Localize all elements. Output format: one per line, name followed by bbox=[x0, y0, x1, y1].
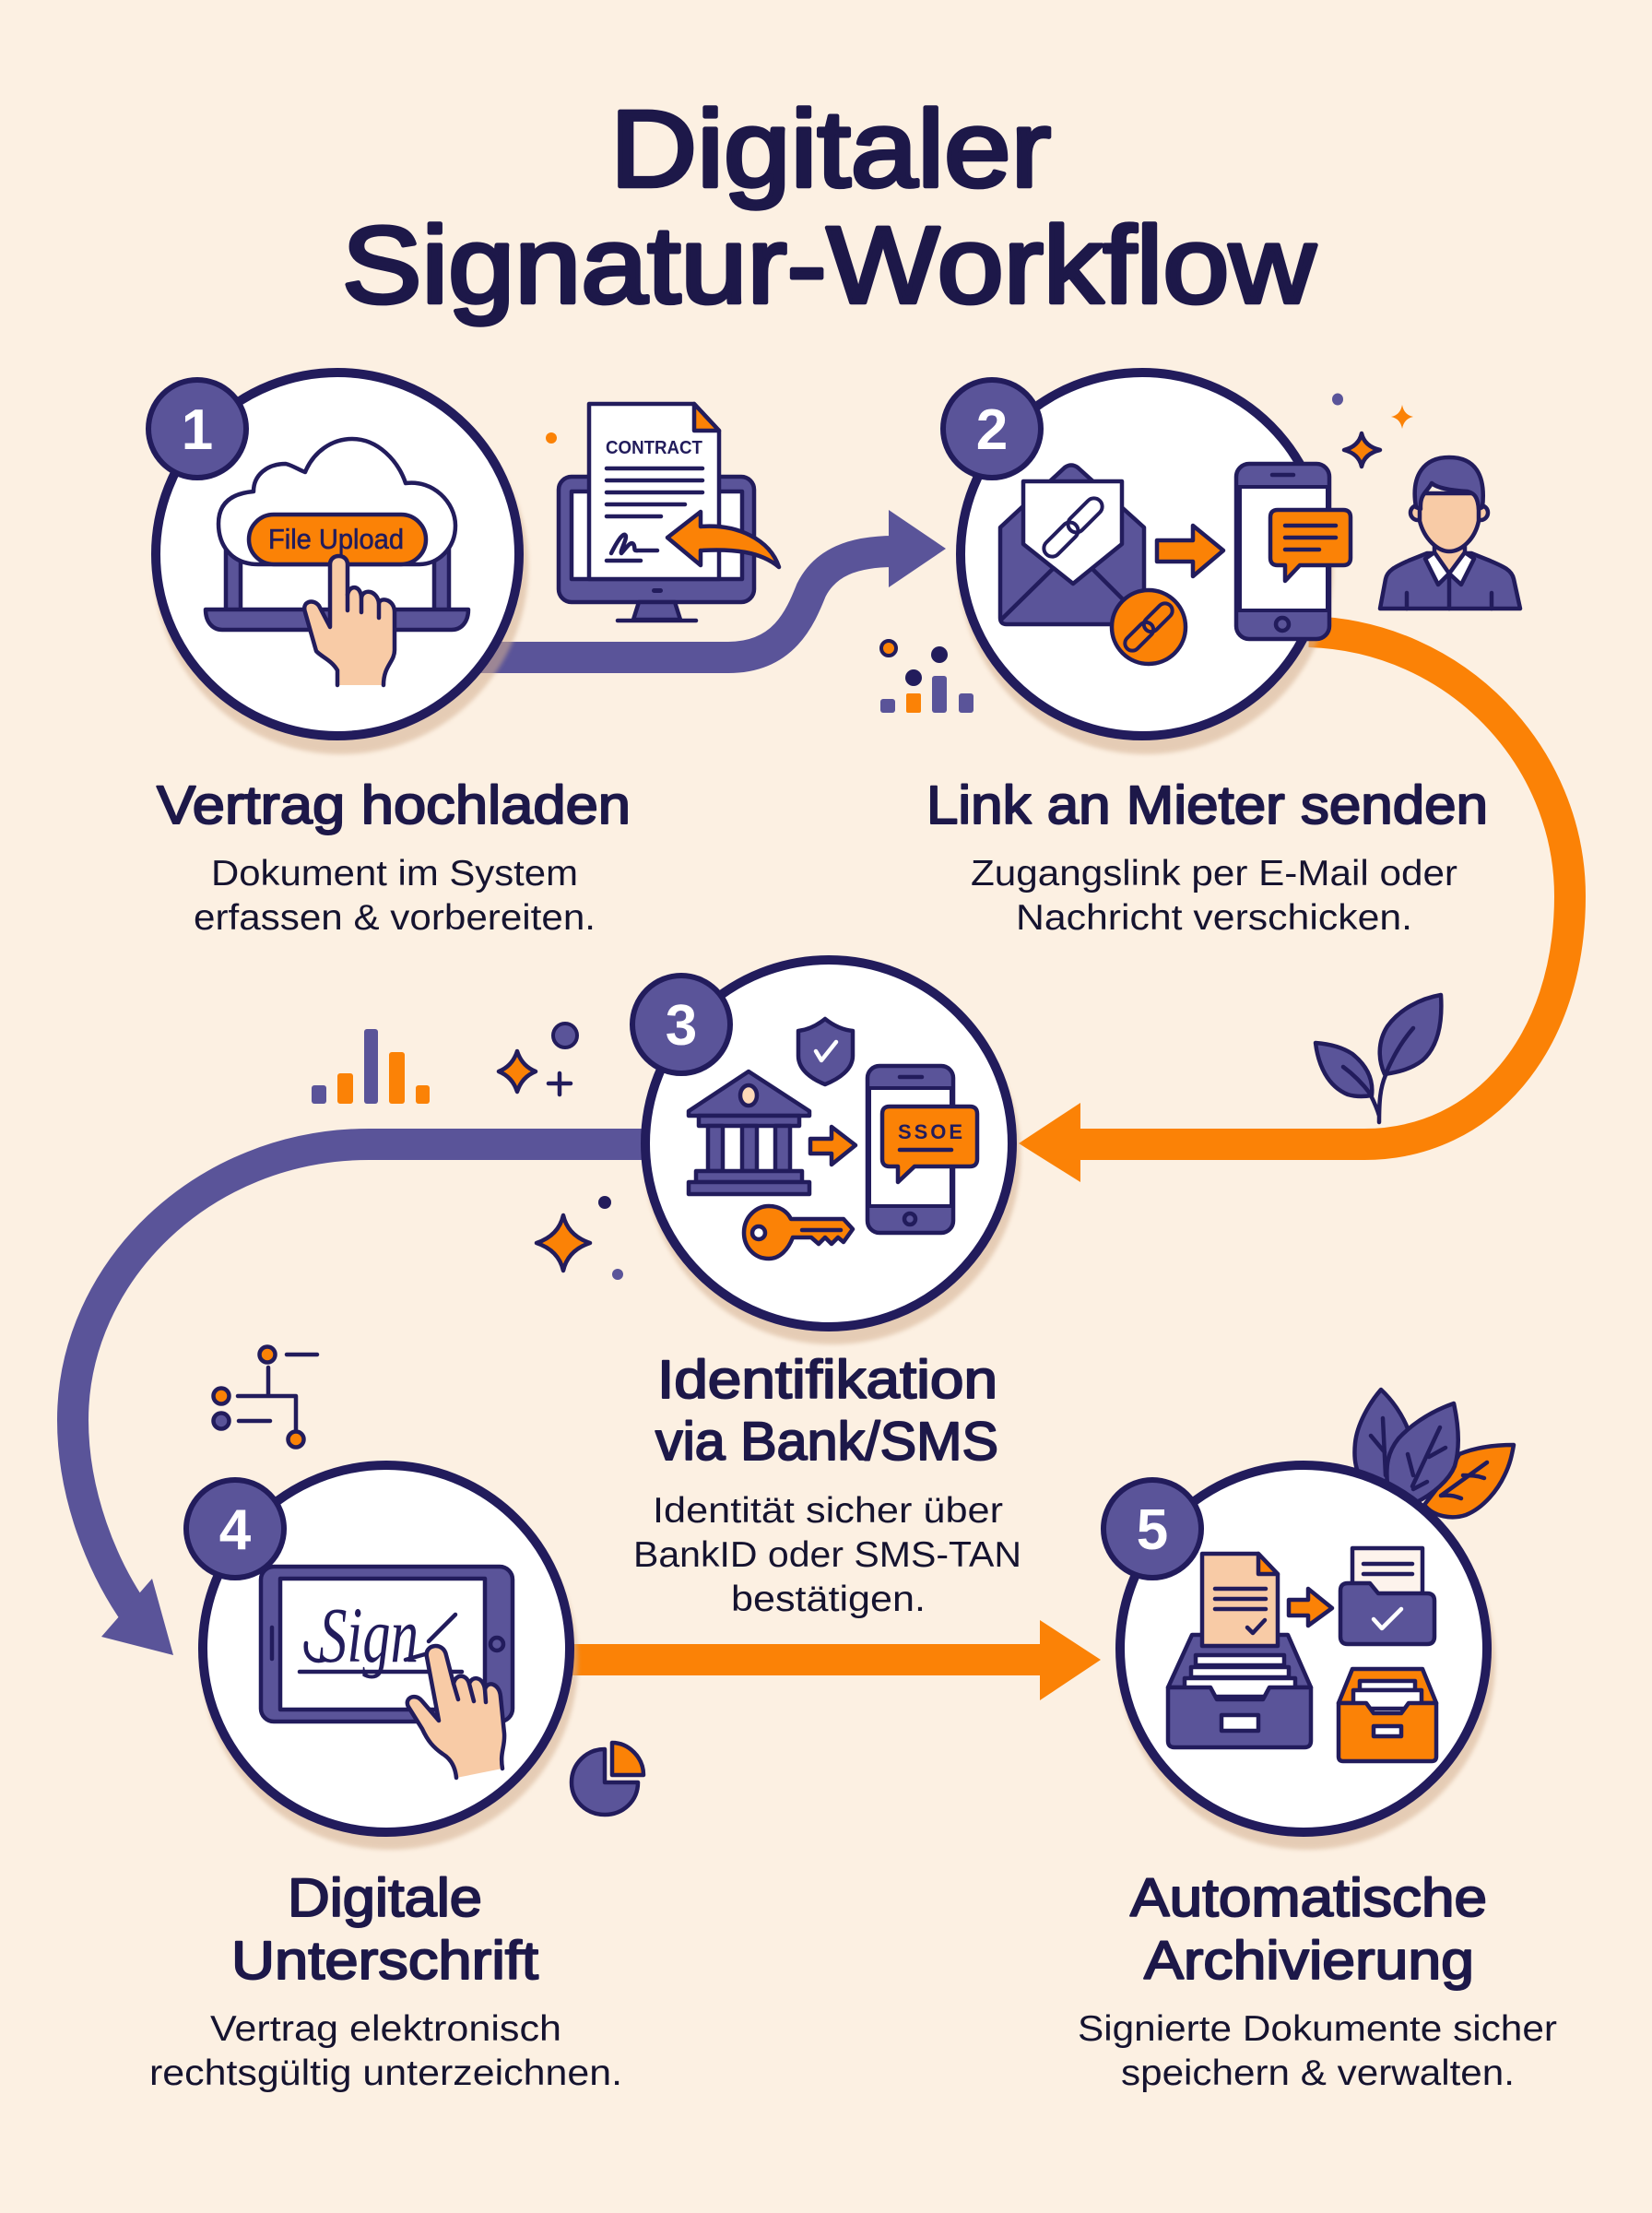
badge: number 2: 2 bbox=[976, 398, 1008, 462]
text block: step 4 bbox=[149, 1868, 622, 2093]
text block: step 4: Unterschrift bbox=[231, 1931, 538, 1991]
text block: step 4: Vertrag elektronisch bbox=[210, 2009, 561, 2049]
icon: archive drawers, document and folder bbox=[1168, 1548, 1436, 1761]
text block: step 1: Dokument im System bbox=[211, 854, 578, 893]
icon: tablet with signature and hand bbox=[261, 1567, 513, 1778]
panel: step 3 circle bbox=[644, 960, 1021, 1344]
text block: step 2 bbox=[926, 775, 1488, 938]
badge: number 5 bbox=[1103, 1480, 1201, 1578]
text block: step 3: Identifikation bbox=[657, 1350, 997, 1410]
text block: step 3 bbox=[633, 1350, 1021, 1619]
text block: step 3: via Bank/SMS bbox=[655, 1412, 998, 1472]
badge: number 4 bbox=[186, 1480, 284, 1578]
arrow: step 2 to step 3 bbox=[1019, 632, 1570, 1182]
panel: step 4 circle bbox=[202, 1465, 578, 1850]
icon: bank, shield, key and phone: SSOE bbox=[898, 1120, 962, 1143]
text block: step 2: Nachricht verschicken. bbox=[1016, 898, 1412, 938]
text block: step 3: BankID oder SMS-TAN bbox=[633, 1535, 1021, 1575]
icon: laptop with cloud upload and hand bbox=[206, 439, 468, 685]
panel: step 2 circle bbox=[959, 373, 1333, 754]
icon: monitor with contract: CONTRACT bbox=[606, 438, 702, 458]
icon: leaves behind step 5 bbox=[1354, 1390, 1514, 1517]
icon: dots and mini bars bbox=[880, 641, 974, 713]
badge: number 3 bbox=[632, 976, 730, 1073]
text block: step 5: speichern & verwalten. bbox=[1121, 2053, 1515, 2093]
text block: step 1: erfassen & vorbereiten. bbox=[194, 898, 596, 938]
title bbox=[342, 89, 1316, 326]
icon: laptop with cloud upload and hand: File Upload bbox=[268, 523, 404, 555]
bar chart decoration bbox=[312, 1029, 430, 1104]
title: Signatur-Workflow bbox=[342, 205, 1316, 326]
text block: step 5 bbox=[1078, 1868, 1557, 2093]
badge: number 5: 5 bbox=[1137, 1498, 1168, 1562]
text block: step 3: bestätigen. bbox=[731, 1580, 926, 1619]
arrow: step 4 to step 5 bbox=[553, 1620, 1101, 1700]
icon: sparkles near step 3 bbox=[499, 1024, 623, 1280]
text block: step 2: Link an Mieter senden bbox=[926, 775, 1488, 835]
text block: step 2: Zugangslink per E-Mail oder bbox=[971, 854, 1457, 893]
icon: monitor with contract bbox=[559, 404, 779, 621]
icon: sparkles near tenant bbox=[1332, 393, 1413, 467]
title: Digitaler bbox=[610, 89, 1051, 210]
icon: tablet with signature and hand: Sign bbox=[319, 1591, 419, 1679]
text block: step 5: Archivierung bbox=[1144, 1931, 1474, 1991]
icon: sprout on orange path bbox=[1316, 995, 1441, 1122]
text block: step 1 bbox=[157, 775, 631, 938]
badge: number 2 bbox=[943, 380, 1041, 478]
text block: step 4: rechtsgültig unterzeichnen. bbox=[149, 2053, 622, 2093]
icon: pie chart bbox=[572, 1743, 643, 1815]
badge: number 3: 3 bbox=[666, 994, 697, 1058]
panel: step 1 circle bbox=[154, 373, 528, 754]
badge: number 4: 4 bbox=[219, 1498, 252, 1562]
badge: number 1 bbox=[148, 380, 246, 478]
icon: envelope with link and phone bbox=[1000, 464, 1351, 664]
arrow: step 3 to step 4 bbox=[73, 1144, 664, 1655]
text block: step 4: Digitale bbox=[288, 1868, 482, 1928]
icon: bank, shield, key and phone bbox=[689, 1019, 977, 1259]
icon: orange dot bbox=[546, 432, 557, 444]
arrow: step 1 to step 2 bbox=[479, 510, 946, 657]
text block: step 5: Signierte Dokumente sicher bbox=[1078, 2009, 1557, 2049]
text block: step 5: Automatische bbox=[1130, 1868, 1487, 1928]
icon: tenant person bbox=[1380, 457, 1520, 609]
icon: network nodes bbox=[214, 1346, 317, 1448]
panel: step 5 circle bbox=[1119, 1465, 1495, 1850]
text block: step 3: Identität sicher über bbox=[653, 1491, 1003, 1531]
badge: number 1: 1 bbox=[182, 398, 213, 462]
text block: step 1: Vertrag hochladen bbox=[157, 775, 631, 835]
